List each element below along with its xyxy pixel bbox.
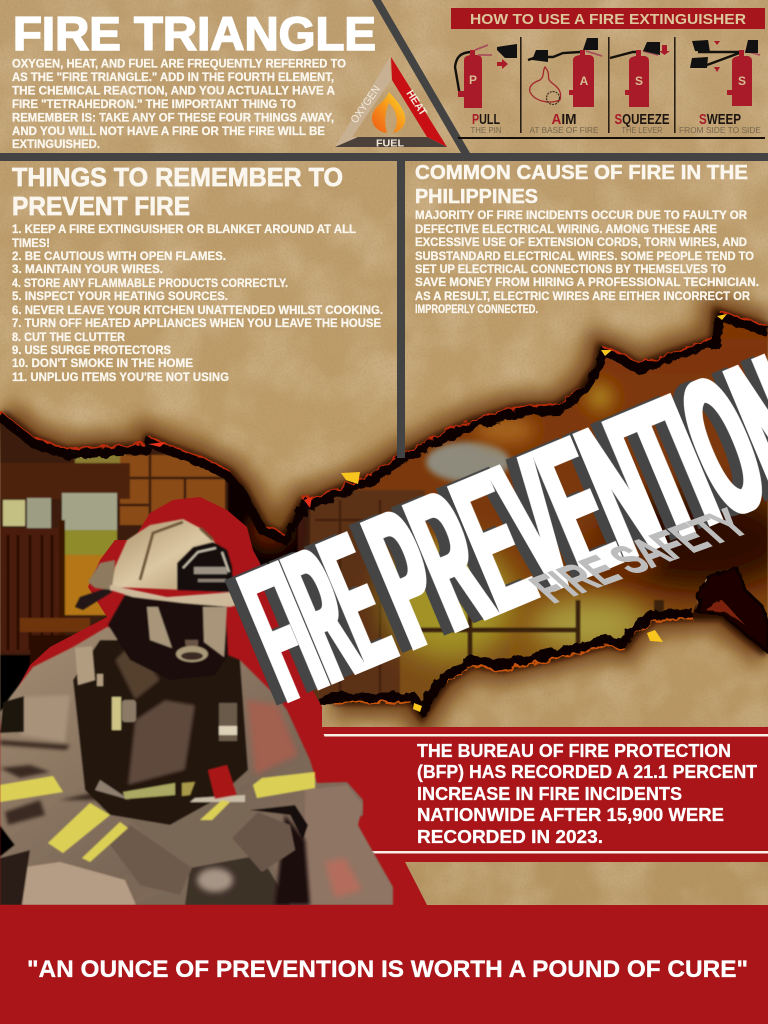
right thigh: [305, 785, 392, 905]
sparks: [148, 314, 727, 712]
fire scene photo: [0, 310, 768, 745]
step: aim: AT BASE OF FIRE: [530, 125, 599, 135]
statistic text: RECORDED IN 2023.: [417, 826, 603, 847]
statistic text: NATIONWIDE AFTER 15,900 WERE: [417, 804, 724, 825]
fire triangle diagram: HEAT: [403, 88, 429, 118]
step: squeeze: S: [635, 74, 643, 88]
right sleeve stain: [247, 700, 298, 775]
step: pull: [455, 44, 517, 135]
list: 7. TURN OFF HEATED APPLIANCES WHEN YOU LEAVE THE HOUSE: [12, 316, 381, 330]
statistic text: [417, 740, 758, 847]
jacket gap: [208, 765, 237, 799]
jacket: [0, 627, 393, 905]
list: 5. INSPECT YOUR HEATING SOURCES.: [12, 289, 228, 303]
paragraph: DEFECTIVE ELECTRICAL WIRING. AMONG THESE ARE: [415, 222, 717, 236]
statistic text: INCREASE IN FIRE INCIDENTS: [417, 783, 682, 804]
scorched paper halo: [0, 317, 768, 710]
text: fire triangle description: FIRE "TETRAHEDRON." THE IMPORTANT THING TO: [12, 97, 296, 111]
red band statistic panel: [300, 727, 768, 905]
left arm folds: [0, 740, 125, 825]
panel: how to use a fire extinguisher: [451, 8, 765, 139]
step: sweep: FROM SIDE TO SIDE: [679, 125, 761, 135]
text: fire triangle description: AS THE "FIRE TRIANGLE." ADD IN THE FOURTH ELEMENT,: [12, 70, 334, 84]
panel: things to remember: [12, 162, 383, 384]
glove left: [105, 825, 192, 895]
step: squeeze: SQUEEZE: [614, 112, 670, 128]
fire triangle diagram: [335, 57, 447, 150]
heading: PREVENT FIRE: [12, 191, 190, 221]
fire triangle diagram: FUEL: [376, 138, 405, 150]
step: pull: P: [469, 73, 477, 87]
list: 10. DON'T SMOKE IN THE HOME: [12, 356, 193, 370]
dividers: [0, 0, 768, 458]
paragraph: AS A RESULT, ELECTRIC WIRES ARE EITHER INCORRECT OR: [415, 289, 750, 303]
list: TIMES!: [12, 236, 50, 250]
chest harness: [73, 640, 248, 825]
heading: [12, 162, 343, 221]
paragraph: MAJORITY OF FIRE INCIDENTS OCCUR DUE TO FAULTY OR: [415, 208, 747, 222]
left building: [0, 422, 311, 720]
heading: COMMON CAUSE OF FIRE IN THE: [415, 162, 748, 184]
step: aim: A: [580, 74, 589, 88]
firefighter figure: [0, 519, 393, 905]
glove right: [232, 812, 295, 872]
paragraph: SUBSTANDARD ELECTRICAL WIRES. SOME PEOPLE TEND TO: [415, 249, 754, 263]
reflective stripes: [0, 772, 315, 862]
step: aim: AIM: [552, 112, 576, 128]
step: sweep: SWEEP: [699, 112, 741, 128]
paragraph: IMPROPERLY CONNECTED.: [415, 302, 538, 316]
firefighter red silhouette: [0, 497, 395, 905]
step: sweep: [679, 40, 761, 135]
heading: THINGS TO REMEMBER TO: [12, 162, 343, 192]
step: squeeze: [610, 42, 670, 135]
paragraph: [415, 208, 759, 316]
panel heading: [451, 8, 765, 29]
step: aim: [528, 38, 602, 135]
hood and face: [108, 595, 228, 680]
sleeve patch: [0, 696, 24, 733]
list: 11. UNPLUG ITEMS YOU'RE NOT USING: [12, 370, 229, 384]
heading: fire triangle: FIRE TRIANGLE: [13, 7, 376, 60]
left thigh: [18, 862, 136, 905]
helmet: [75, 519, 252, 610]
list: 9. USE SURGE PROTECTORS: [12, 343, 171, 357]
paragraph: SET UP ELECTRICAL CONNECTIONS BY THEMSELVES TO: [415, 262, 726, 276]
list: 6. NEVER LEAVE YOUR KITCHEN UNATTENDED WHILST COOKING.: [12, 303, 383, 317]
list: 3. MAINTAIN YOUR WIRES.: [12, 262, 163, 276]
step: pull: THE PIN: [470, 125, 502, 135]
title: fire prevention: FIRE: [208, 495, 405, 744]
statistic text: THE BUREAU OF FIRE PROTECTION: [417, 740, 731, 761]
title: fire prevention: FIRE: [219, 493, 416, 742]
bottom quote banner: [0, 905, 768, 1024]
text: fire triangle description: OXYGEN, HEAT, AND FUEL ARE FREQUENTLY REFERRED TO: [12, 56, 346, 70]
central building: [310, 490, 510, 710]
list: 8. CUT THE CLUTTER: [12, 330, 125, 344]
statistic text: (BFP) HAS RECORDED A 21.1 PERCENT: [417, 761, 758, 782]
text: fire triangle description: EXTINGUISHED.: [12, 137, 100, 151]
paragraph: SAVE MONEY FROM HIRING A PROFESSIONAL TECHNICIAN.: [415, 275, 759, 289]
step: pull: PULL: [472, 112, 500, 128]
step: squeeze: THE LEVER: [622, 125, 662, 135]
list: 4. STORE ANY FLAMMABLE PRODUCTS CORRECTLY.: [12, 276, 288, 290]
text: fire triangle description: [12, 56, 346, 151]
step: sweep: S: [738, 74, 746, 88]
panel: common cause of fire: [415, 162, 759, 316]
text: fire triangle description: THE CHEMICAL REACTION, AND YOU ACTUALLY HAVE A: [12, 84, 335, 98]
dark fold: [275, 815, 310, 905]
fire triangle diagram: OXYGEN: [349, 84, 383, 126]
text: fire triangle description: AND YOU WILL NOT HAVE A FIRE OR THE FIRE WILL BE: [12, 124, 325, 138]
bottom quote banner: "AN OUNCE OF PREVENTION IS WORTH A POUND OF CURE": [27, 956, 748, 983]
list: 1. KEEP A FIRE EXTINGUISHER OR BLANKET AROUND AT ALL: [12, 222, 356, 236]
text: fire triangle description: REMEMBER IS: TAKE ANY OF THESE FOUR THINGS AWAY,: [12, 110, 334, 124]
smoke and flames: [385, 383, 768, 690]
panel heading: HOW TO USE A FIRE EXTINGUISHER: [470, 11, 746, 28]
list: [12, 222, 383, 384]
lower centre: [130, 790, 285, 905]
heading: PHILIPPINES: [415, 186, 538, 208]
heading: [415, 162, 748, 208]
list: 2. BE CAUTIOUS WITH OPEN FLAMES.: [12, 249, 226, 263]
burnt paper edges: [0, 312, 768, 715]
paragraph: EXCESSIVE USE OF EXTENSION CORDS, TORN WIRES, AND: [415, 235, 747, 249]
